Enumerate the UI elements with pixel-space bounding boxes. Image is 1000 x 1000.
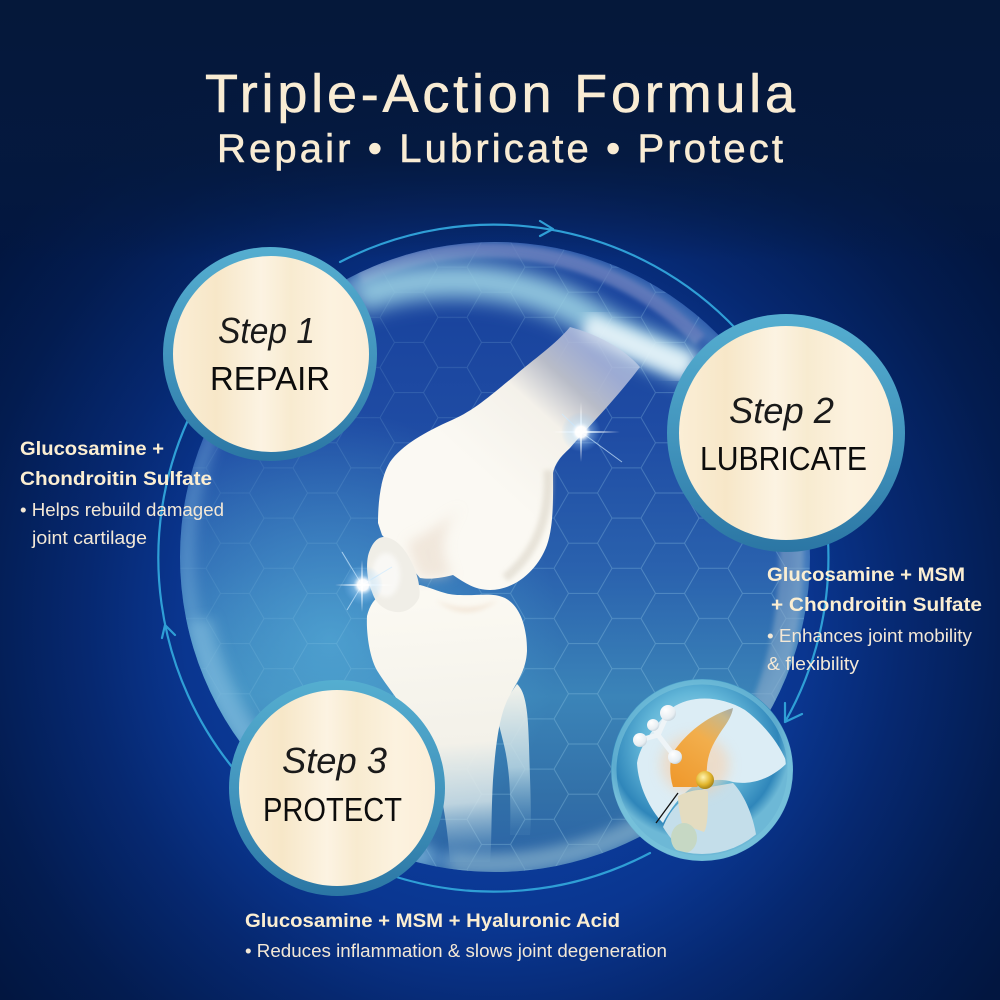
- inset tibia: [663, 783, 757, 859]
- trabecular bone: [670, 708, 733, 787]
- text block: step 2 ingredients: & flexibility: [767, 653, 860, 674]
- badge ring: [667, 314, 905, 552]
- sphere lower-left light: [180, 242, 810, 872]
- text block: step 2 ingredients: • Enhances joint mobility: [767, 625, 973, 646]
- step label: Step 2: [729, 390, 834, 431]
- title: [205, 64, 796, 171]
- heading: Triple-Action Formula: Triple-Action Formula: [205, 64, 796, 124]
- text block: step 1 ingredients: Glucosamine +: [20, 439, 164, 460]
- femoral condyle shade: [408, 505, 463, 578]
- sphere rim: [187, 249, 803, 865]
- yellow droplet: [696, 771, 714, 789]
- text block: step 1 ingredients: [20, 439, 224, 548]
- inset sphere: joint cross-section: [611, 679, 793, 861]
- arc: mini sphere to step 3: [390, 853, 650, 892]
- molecule: [633, 705, 682, 764]
- tibia cartilage shade: [436, 600, 498, 612]
- text block: step 1 ingredients: joint cartilage: [31, 527, 147, 548]
- text block: step 3 ingredients: [245, 911, 667, 961]
- inflamed glow: [661, 735, 729, 795]
- arc: step 1 to step 2: [340, 221, 737, 330]
- text block: step 3 ingredients: Glucosamine + MSM + Hyaluronic Acid: [245, 911, 620, 932]
- sparkle: femur: [552, 402, 622, 462]
- text block: step 3 ingredients: • Reduces inflammation & slows joint degeneration: [245, 940, 667, 961]
- badge face: [173, 256, 369, 452]
- femur right side shade: [505, 470, 548, 578]
- text block: step 2 ingredients: Glucosamine + MSM: [767, 565, 965, 586]
- badge ring: [163, 247, 377, 461]
- fibula: [498, 684, 531, 835]
- badge face: [679, 326, 893, 540]
- text block: step 1 ingredients: • Helps rebuild damaged: [20, 499, 224, 520]
- pointer line: [656, 793, 678, 823]
- step name: REPAIR: [210, 360, 330, 397]
- inset joint bones: [678, 790, 708, 832]
- arc: step 2 to mini sphere: [785, 540, 828, 722]
- step name: PROTECT: [263, 791, 402, 828]
- sparkle: patella: [335, 552, 395, 612]
- hexagon grid: [170, 240, 820, 880]
- patella highlight: [372, 553, 400, 597]
- central glass sphere: [170, 240, 820, 880]
- inset sphere body: [611, 679, 793, 861]
- patella: [367, 537, 420, 612]
- text block: step 1 ingredients: Chondroitin Sulfate: [20, 469, 212, 490]
- tibia: [367, 585, 527, 862]
- femur: [378, 327, 640, 590]
- step 3 badge: [229, 680, 445, 896]
- inset anatomy: [637, 698, 787, 859]
- subheading: Repair • Lubricate • Protect: [217, 127, 783, 171]
- step name: LUBRICATE: [700, 440, 867, 477]
- step label: Step 1: [218, 310, 315, 351]
- sphere body: [180, 242, 810, 872]
- badge ring: [229, 680, 445, 896]
- badge face: [239, 690, 435, 886]
- step 2 badge: [667, 314, 905, 552]
- step 1 badge: [163, 247, 377, 461]
- arc: step 3 to step 1: [158, 420, 237, 773]
- text block: step 2 ingredients: + Chondroitin Sulfate: [771, 595, 982, 616]
- orbit arrows: [158, 221, 828, 892]
- text block: step 2 ingredients: [767, 565, 982, 674]
- inset femur: [637, 698, 787, 823]
- inset capsule: [671, 823, 697, 853]
- step label: Step 3: [282, 740, 387, 781]
- knee joint illustration: [335, 327, 640, 862]
- inset glass rim: [614, 682, 790, 858]
